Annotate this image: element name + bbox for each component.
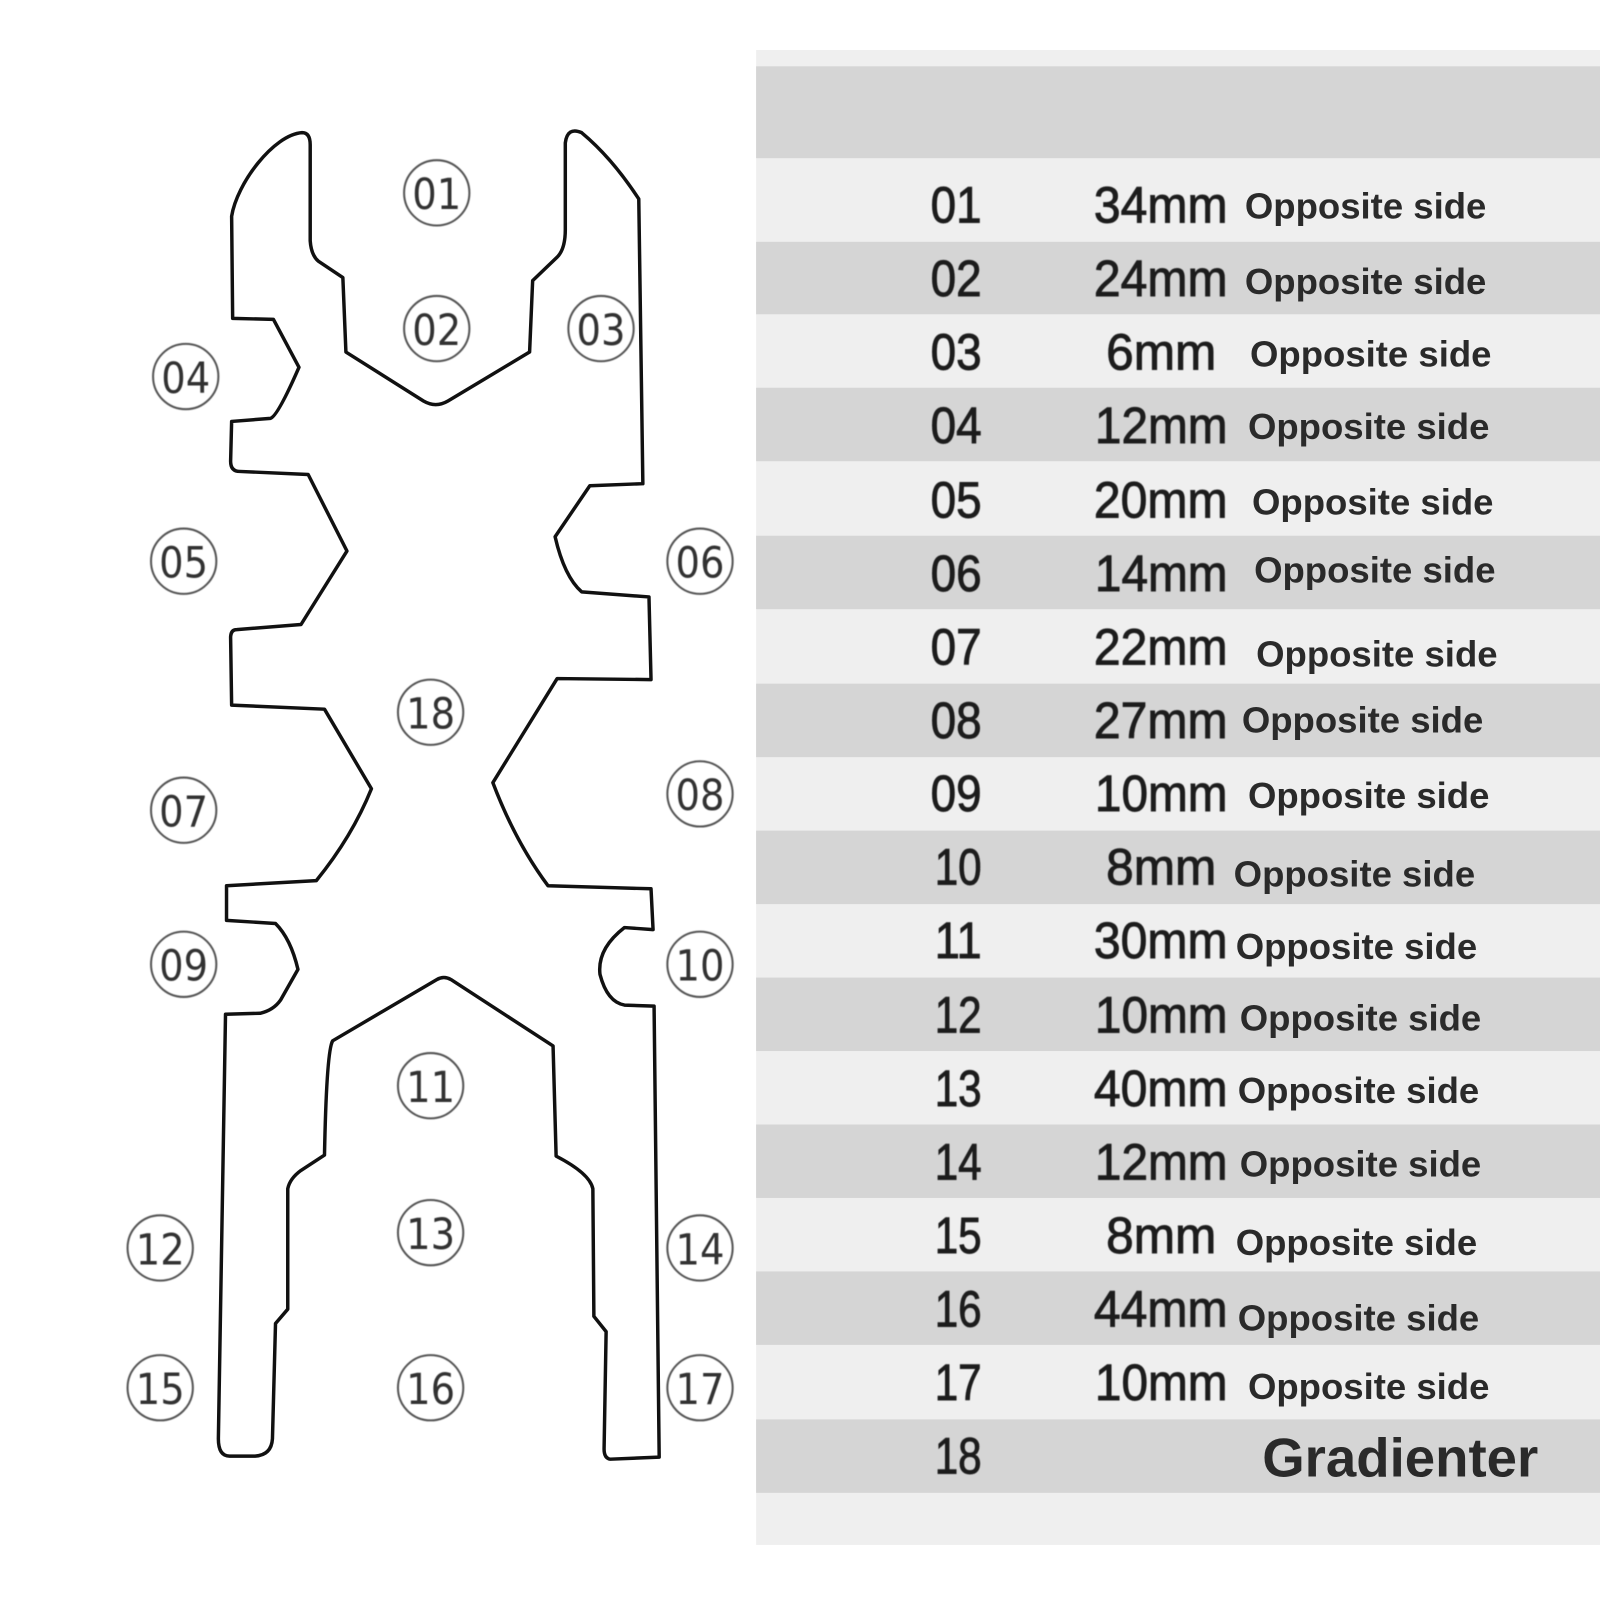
row 12: Opposite side	[1240, 998, 1481, 1039]
row 14: 12mm	[1095, 1134, 1228, 1191]
marker 11: 11	[406, 1063, 455, 1113]
row 15	[935, 1207, 1477, 1264]
row 04: 12mm	[1095, 397, 1228, 454]
row 07	[931, 618, 1498, 675]
marker 02	[404, 296, 469, 361]
row 09	[931, 765, 1489, 822]
row 03: 6mm	[1106, 323, 1216, 380]
row 03	[931, 323, 1491, 380]
row 02: Opposite side	[1245, 261, 1486, 302]
row 06: 14mm	[1095, 545, 1228, 602]
row 08: 27mm	[1094, 692, 1228, 749]
row 07: 07	[931, 618, 982, 675]
row 02: 24mm	[1094, 250, 1228, 307]
marker 13: 13	[406, 1210, 455, 1260]
row 05: 20mm	[1094, 471, 1228, 528]
row 10: 8mm	[1106, 839, 1216, 896]
row 17: 10mm	[1095, 1354, 1228, 1411]
row 13: 13	[935, 1060, 982, 1117]
marker 06	[667, 529, 733, 594]
row 09: 10mm	[1095, 765, 1228, 822]
row 17: 17	[935, 1354, 982, 1411]
row 16: 16	[935, 1281, 982, 1338]
marker 13	[398, 1200, 463, 1265]
marker 03	[568, 296, 634, 361]
row 17: Opposite side	[1248, 1366, 1489, 1407]
marker 09: 09	[159, 942, 208, 992]
row 18: Gradienter	[1262, 1428, 1538, 1489]
marker 17: 17	[676, 1365, 724, 1415]
marker 15	[128, 1355, 193, 1420]
marker 01	[404, 160, 469, 226]
row 05: 05	[931, 471, 982, 528]
row 17	[935, 1354, 1489, 1411]
marker 01: 01	[412, 170, 461, 220]
row 15: 15	[935, 1207, 982, 1264]
row 18: 18	[935, 1427, 982, 1484]
marker 10	[667, 932, 733, 997]
row 15: 8mm	[1106, 1207, 1216, 1264]
row 18	[935, 1427, 1538, 1489]
marker 14: 14	[676, 1225, 724, 1275]
marker 05	[151, 529, 216, 594]
row 04	[931, 397, 1489, 454]
row 12	[935, 987, 1481, 1044]
row 03: Opposite side	[1250, 333, 1491, 374]
row 05: Opposite side	[1252, 481, 1493, 522]
row 14: Opposite side	[1240, 1144, 1481, 1185]
marker 04: 04	[161, 354, 210, 404]
wrench outline	[218, 131, 659, 1459]
row 10: Opposite side	[1234, 854, 1475, 895]
row 07: 22mm	[1094, 618, 1228, 675]
row 06: 06	[931, 545, 982, 602]
row 11: 30mm	[1094, 912, 1228, 969]
row 06	[931, 545, 1496, 602]
marker 10: 10	[676, 942, 724, 992]
row 11	[935, 912, 1477, 969]
marker 15: 15	[136, 1365, 185, 1415]
marker 08: 08	[676, 771, 724, 821]
row 04: Opposite side	[1248, 406, 1489, 447]
marker 16: 16	[406, 1365, 455, 1415]
row 01	[931, 176, 1486, 233]
marker 18	[398, 680, 463, 745]
callout markers	[128, 160, 733, 1420]
row 16: Opposite side	[1238, 1298, 1479, 1339]
row 02	[931, 250, 1486, 307]
row 05	[931, 471, 1493, 528]
row 02: 02	[931, 250, 982, 307]
row 01: 01	[931, 176, 982, 233]
marker 14	[667, 1215, 733, 1281]
row 04: 04	[931, 397, 982, 454]
row 03: 03	[931, 323, 982, 380]
marker 03: 03	[577, 306, 626, 356]
header band	[756, 66, 1600, 158]
marker 11	[398, 1053, 463, 1118]
marker 17	[667, 1355, 733, 1420]
marker 07	[151, 778, 216, 843]
row 11: 11	[935, 912, 982, 969]
row 16: 44mm	[1094, 1281, 1228, 1338]
row 16	[935, 1281, 1479, 1339]
row 09: 09	[931, 765, 982, 822]
marker 07: 07	[159, 788, 208, 838]
row 08: 08	[931, 692, 982, 749]
row 06: Opposite side	[1254, 550, 1496, 591]
marker 12	[128, 1215, 193, 1281]
row 13: Opposite side	[1238, 1070, 1479, 1111]
row 14	[935, 1134, 1481, 1191]
row 01: Opposite side	[1245, 185, 1486, 226]
row 01: 34mm	[1094, 176, 1228, 233]
row 07: Opposite side	[1256, 633, 1498, 674]
marker 08	[667, 761, 733, 827]
row 14: 14	[935, 1134, 982, 1191]
row 15: Opposite side	[1236, 1222, 1477, 1263]
marker 18: 18	[406, 690, 455, 740]
marker 12: 12	[136, 1225, 185, 1275]
row 12: 10mm	[1095, 987, 1228, 1044]
marker 06: 06	[676, 539, 724, 589]
row 08: Opposite side	[1242, 700, 1483, 741]
row 11: Opposite side	[1236, 926, 1477, 967]
row 12: 12	[935, 987, 982, 1044]
row 09: Opposite side	[1248, 775, 1489, 816]
marker 16	[398, 1355, 463, 1420]
marker 02: 02	[412, 306, 461, 356]
row 10	[935, 839, 1475, 896]
row 13: 40mm	[1094, 1060, 1228, 1117]
marker 09	[151, 932, 216, 997]
marker 04	[153, 344, 218, 409]
marker 05: 05	[159, 539, 208, 589]
row 08	[931, 692, 1483, 749]
row 10: 10	[935, 839, 982, 896]
row 13	[935, 1060, 1479, 1117]
panel: size table	[756, 50, 1600, 1545]
